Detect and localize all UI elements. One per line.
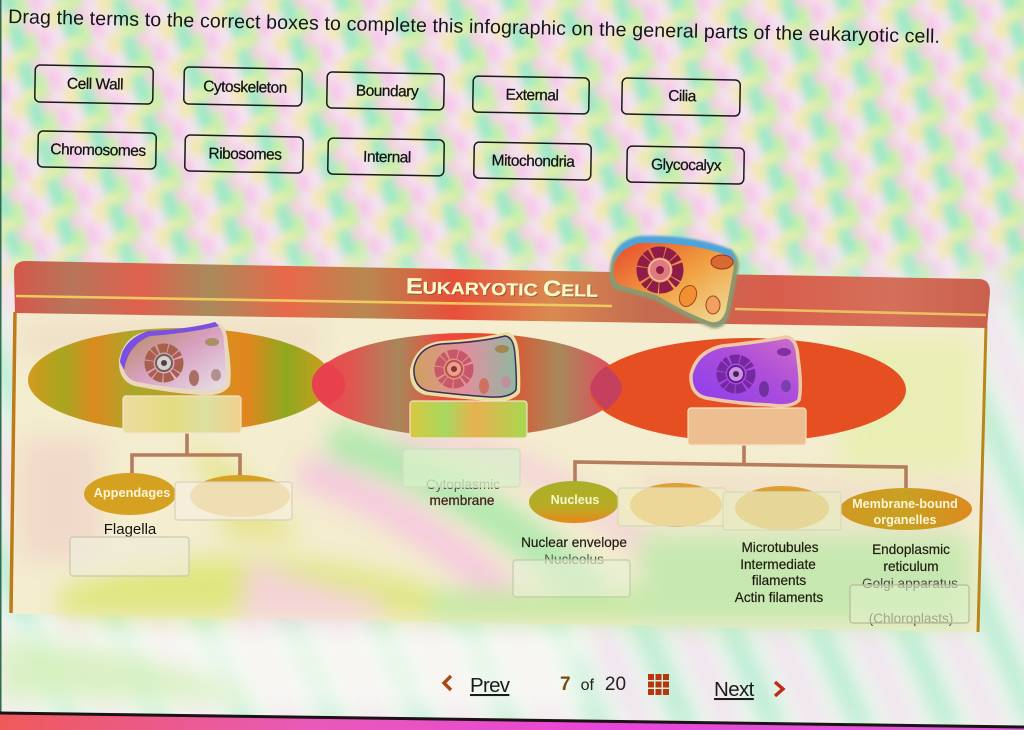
panel: eukaryotic cell diagram — [11, 236, 990, 632]
ellipse: internal structures — [590, 338, 906, 442]
drop box: nucleus sibling — [618, 488, 726, 526]
heading: eukaryotic cell: EUKARYOTIC CELL — [406, 273, 598, 302]
label: membrane line: membrane — [430, 493, 494, 508]
term buttons — [35, 65, 744, 184]
hidden ellipses behind drop boxes — [190, 475, 829, 530]
drop box: chloroplasts — [850, 585, 969, 623]
heading: eukaryotic cell: EUKARYOTIC CELL — [407, 274, 599, 303]
list: nucleus parts: Nucleolus — [544, 552, 604, 567]
drop box: top left — [123, 396, 241, 433]
link: prev: Prev — [470, 674, 511, 697]
panel body — [11, 310, 986, 632]
term: mitochondria: Mitochondria — [491, 152, 575, 171]
term: boundary: Boundary — [356, 82, 419, 101]
pagination — [444, 674, 783, 701]
connector lines — [132, 433, 906, 488]
node: membrane-bound organelles: Membrane-bound — [852, 497, 958, 511]
node: appendages — [84, 473, 176, 515]
list: organelle parts: (Chloroplasts) — [869, 611, 953, 626]
link: next: Next — [714, 678, 755, 701]
list: cytoskeleton parts: Microtubules — [741, 540, 819, 555]
list: organelle parts: reticulum — [883, 559, 939, 574]
term: ribosomes — [185, 135, 303, 173]
node: membrane-bound organelles — [840, 488, 972, 530]
term: external — [473, 76, 589, 114]
cell illustration 1 — [120, 322, 230, 394]
term: glycocalyx: Glycocalyx — [651, 156, 722, 175]
screen bottom edge — [0, 713, 1024, 730]
drop box: nucleolus — [513, 560, 630, 597]
drop box: appendage — [175, 482, 292, 520]
list: cytoskeleton parts — [735, 540, 823, 605]
term: cytoskeleton — [184, 67, 302, 106]
drop box: top middle — [410, 401, 527, 438]
term: cilia: Cilia — [668, 88, 697, 105]
cell illustration 2 — [411, 333, 519, 400]
instruction title: Drag the terms to the correct boxes to complete this infographic on the general parts of the eukaryotic cell. — [8, 6, 940, 48]
labels: cytoplasmic membrane: Cytoplasmic — [426, 477, 500, 492]
list: organelle parts — [862, 542, 958, 626]
term: cilia — [622, 78, 740, 116]
arrow: previous — [444, 676, 451, 690]
ellipse: boundary — [312, 333, 622, 437]
term: glycocalyx — [627, 146, 744, 184]
term: mitochondria — [474, 142, 591, 180]
ellipse: external structures — [28, 328, 332, 432]
cell illustration 3 — [691, 337, 800, 406]
list: nucleus parts: Nuclear envelope — [521, 535, 627, 550]
list: organelle parts: Endoplasmic — [872, 542, 950, 557]
term: ribosomes: Ribosomes — [208, 145, 282, 164]
list: cytoskeleton parts: Actin filaments — [735, 590, 823, 605]
list: organelle parts: Golgi apparatus — [862, 576, 958, 591]
drop box: top right — [688, 408, 806, 445]
term: external: External — [505, 87, 559, 104]
page counter: 7 of 20 — [560, 674, 626, 695]
list: cytoskeleton parts: filaments — [752, 573, 806, 588]
term: cytoskeleton: Cytoskeleton — [203, 78, 287, 97]
drop box: cytoskeleton node — [723, 492, 841, 530]
node: appendages: Appendages — [94, 485, 170, 500]
term: boundary — [327, 72, 444, 110]
ellipse overlap — [590, 366, 622, 410]
node: nucleus: Nucleus — [551, 493, 599, 507]
panel header band — [14, 261, 990, 328]
arrow: next — [775, 682, 783, 696]
node: membrane-bound organelles: organelles — [874, 513, 936, 527]
hero cell illustration — [610, 236, 739, 328]
term: internal — [328, 138, 444, 176]
term: chromosomes: Chromosomes — [50, 141, 147, 160]
drop box: above cytoplasmic membrane — [403, 449, 520, 487]
term: cell wall — [35, 65, 153, 104]
term: internal: Internal — [363, 149, 411, 166]
list: cytoskeleton parts: Intermediate — [740, 557, 816, 572]
icon: page grid — [648, 674, 669, 695]
drop box: flagella — [70, 537, 189, 576]
term: chromosomes — [38, 131, 156, 169]
list: nucleus parts — [521, 535, 627, 567]
node: nucleus — [529, 481, 619, 523]
label: flagella: Flagella — [104, 521, 157, 538]
term: cell wall: Cell Wall — [67, 76, 123, 94]
